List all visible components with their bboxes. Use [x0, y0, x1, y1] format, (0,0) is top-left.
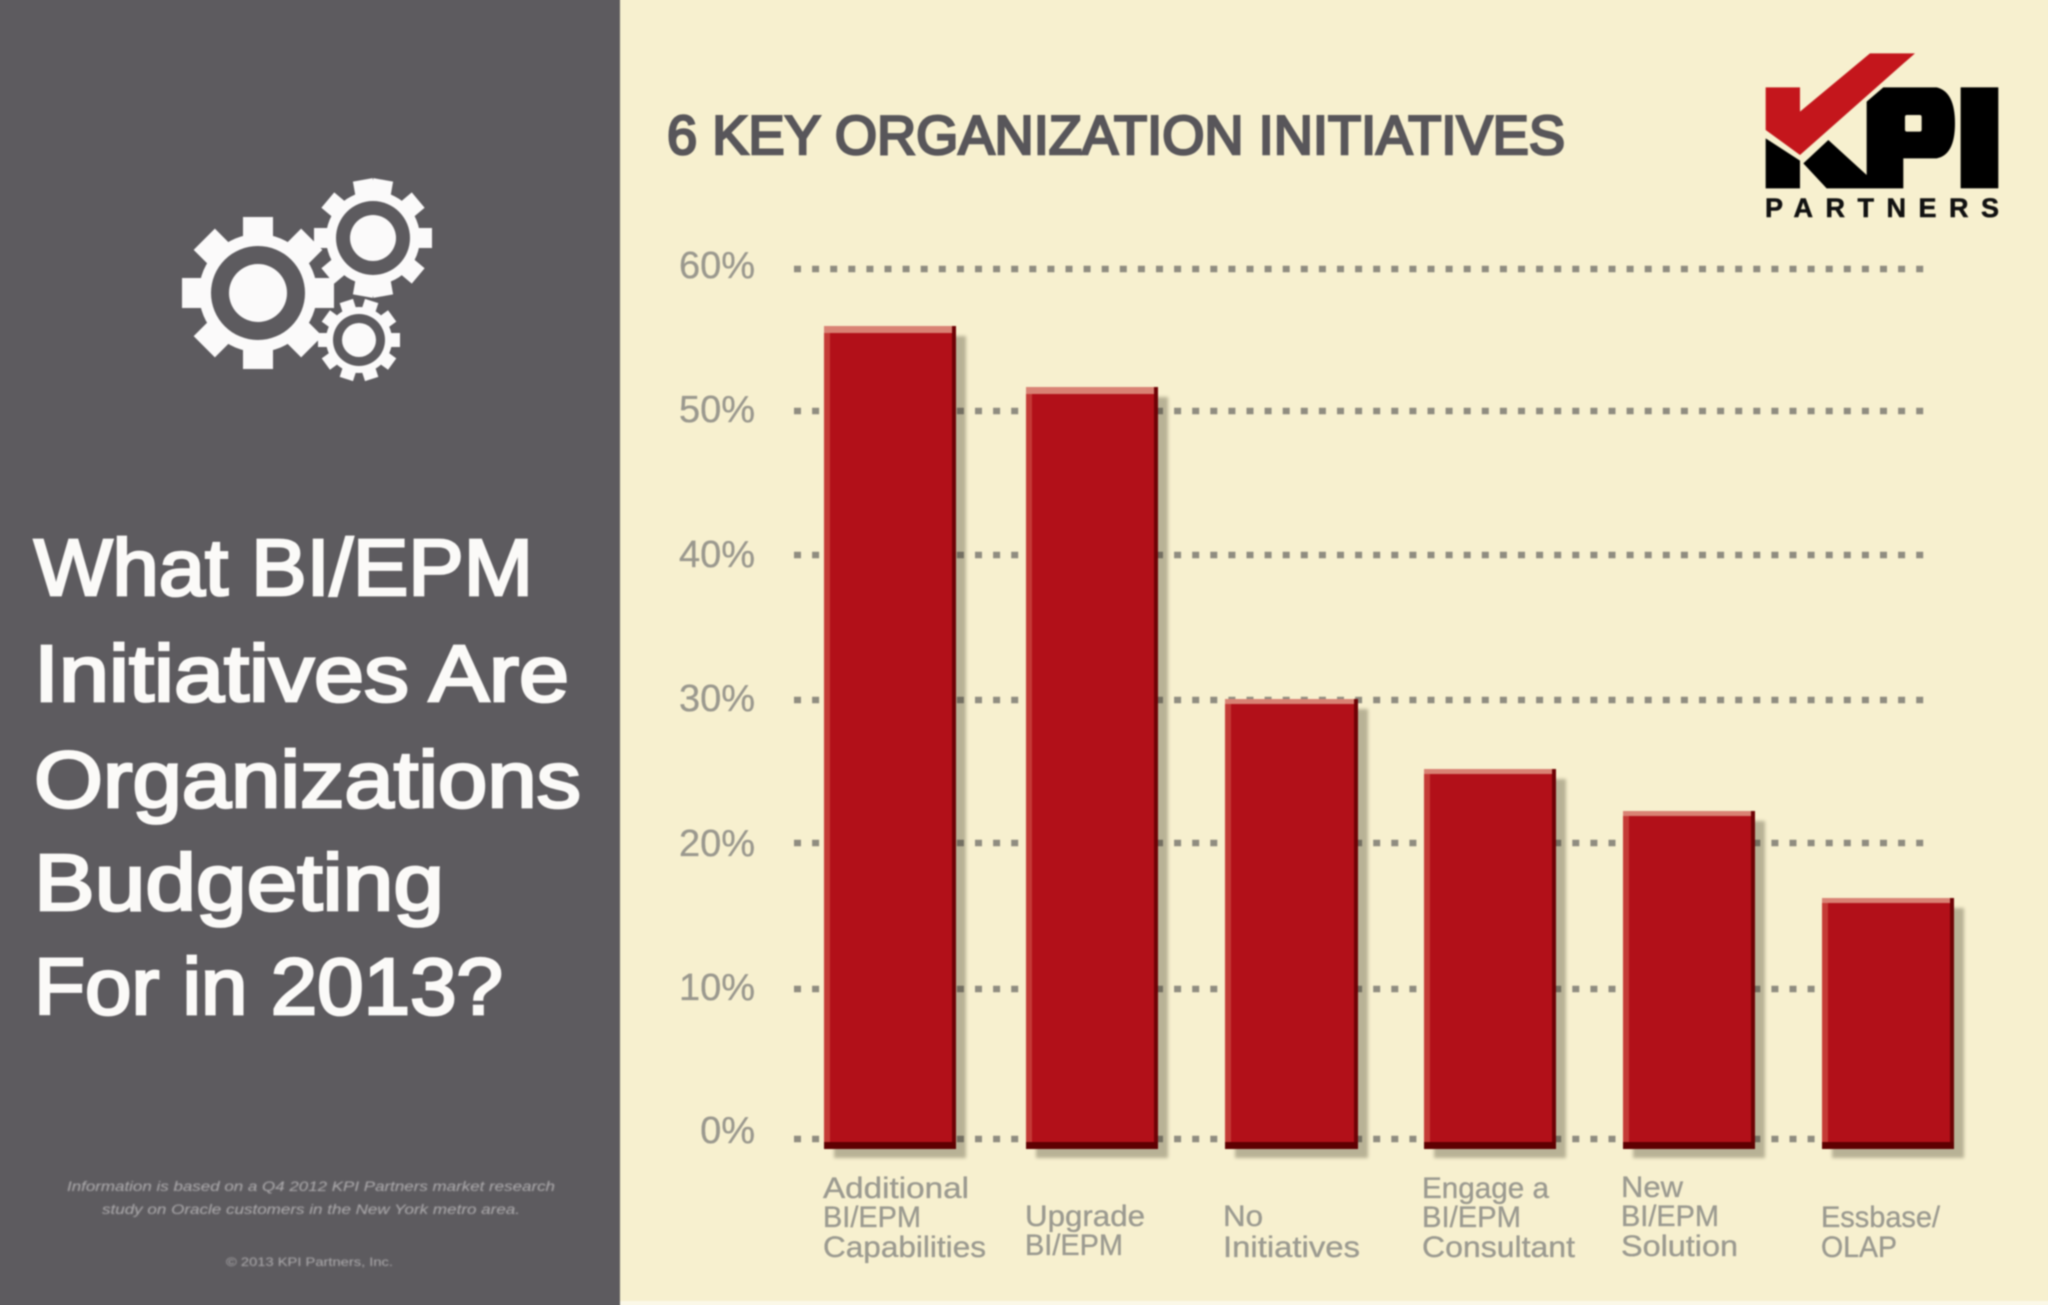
axis: y labels: 50%: [679, 389, 755, 431]
label: New BI/EPM Solution: Solution: [1621, 1230, 1738, 1263]
label: Essbase/OLAP: OLAP: [1821, 1231, 1897, 1264]
axis: y labels: 0%: [700, 1110, 755, 1152]
text: copyright: © 2013 KPI Partners, Inc.: [226, 1255, 393, 1269]
bar: No Initiatives: [1225, 699, 1368, 1158]
heading: chart title: 6 KEY ORGANIZATION INITIATIVES: [667, 104, 1565, 166]
heading: sidebar question: Budgeting: [34, 838, 444, 927]
heading: sidebar question: For in 2013?: [34, 942, 503, 1031]
label: Engage a BI/EPM Consultant: Consultant: [1422, 1231, 1576, 1264]
label: New BI/EPM Solution: [1621, 1171, 1738, 1263]
chart: initiatives bar chart: [679, 245, 1964, 1264]
axis: y labels: 60%: [679, 245, 755, 287]
bar: Essbase/OLAP: [1822, 898, 1964, 1158]
gridlines: dotted: [794, 269, 1924, 1139]
label: Additional BI/EPM Capabilities: [823, 1172, 986, 1264]
bar: New BI/EPM Solution: [1623, 811, 1765, 1158]
label: Essbase/OLAP: Essbase/: [1821, 1201, 1941, 1234]
axis: y labels: 20%: [679, 823, 755, 865]
label: Upgrade BI/EPM: Upgrade: [1025, 1200, 1145, 1233]
label: Upgrade BI/EPM: BI/EPM: [1025, 1229, 1123, 1262]
label: New BI/EPM Solution: New: [1621, 1171, 1683, 1204]
icon: gears: [182, 178, 432, 381]
text: source note: study on Oracle customers in the New York metro area.: [102, 1201, 520, 1217]
bar: Engage a BI/EPM Consultant: [1424, 769, 1566, 1158]
logo: KPI Partners: PARTNERS: [1765, 193, 1999, 223]
label: Additional BI/EPM Capabilities: Additional: [823, 1172, 969, 1205]
label: Engage a BI/EPM Consultant: [1422, 1172, 1576, 1264]
axis: y labels: [679, 245, 755, 1152]
heading: sidebar question: [34, 523, 581, 1031]
label: Engage a BI/EPM Consultant: Engage a: [1422, 1172, 1549, 1205]
heading: sidebar question: Initiatives Are: [34, 629, 569, 718]
label: Upgrade BI/EPM: [1025, 1200, 1145, 1262]
label: Additional BI/EPM Capabilities: BI/EPM: [823, 1201, 921, 1234]
axis: y labels: 10%: [679, 967, 755, 1009]
heading: sidebar question: Organizations: [34, 735, 581, 824]
axis: y labels: 30%: [679, 678, 755, 720]
bar: Additional BI/EPM Capabilities: [824, 326, 966, 1158]
label: Essbase/OLAP: [1821, 1201, 1941, 1264]
label: No Initiatives: Initiatives: [1223, 1231, 1360, 1264]
label: No Initiatives: [1223, 1200, 1360, 1264]
label: No Initiatives: No: [1223, 1200, 1263, 1233]
text: source note: Information is based on a Q4 2012 KPI Partners market research: [67, 1178, 555, 1194]
text: source note: [67, 1178, 555, 1217]
label: Additional BI/EPM Capabilities: Capabilities: [823, 1231, 986, 1264]
panel: left sidebar: [0, 0, 620, 1305]
bar: Upgrade BI/EPM: [1026, 387, 1168, 1158]
axis: y labels: 40%: [679, 534, 755, 576]
heading: sidebar question: What BI/EPM: [34, 523, 533, 612]
label: New BI/EPM Solution: BI/EPM: [1621, 1200, 1719, 1233]
logo: KPI Partners: [1765, 53, 1999, 223]
label: Engage a BI/EPM Consultant: BI/EPM: [1422, 1201, 1521, 1234]
